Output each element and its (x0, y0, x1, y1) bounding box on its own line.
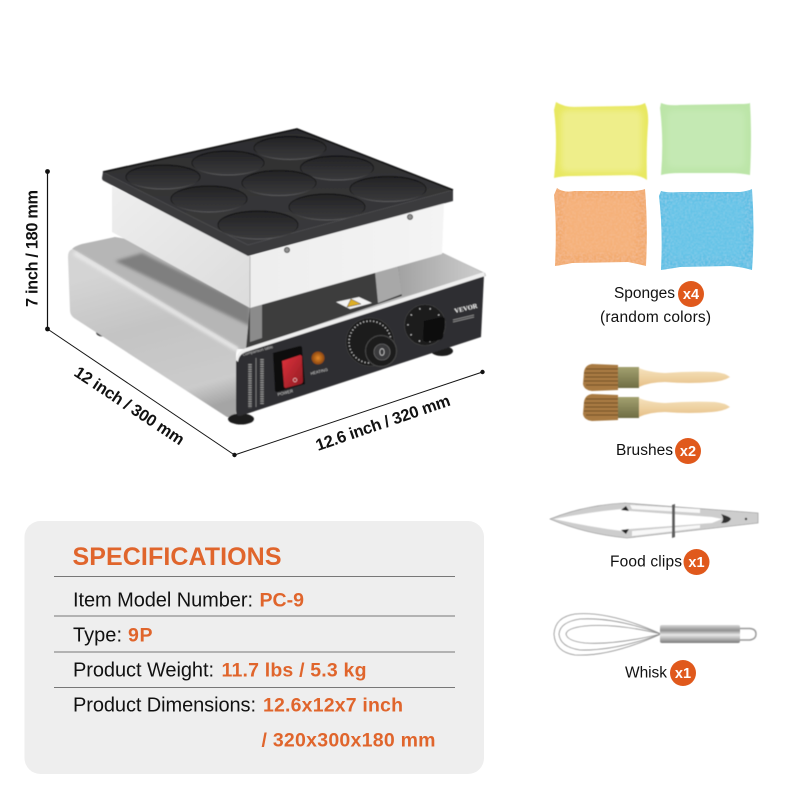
height label: 7 inch / 180 mm (24, 190, 42, 307)
base right deck (398, 253, 485, 297)
rear foot (96, 328, 108, 336)
right foot (431, 346, 453, 356)
loop slot (721, 514, 731, 523)
well 4 (300, 156, 374, 180)
lower arm highlight (632, 525, 700, 536)
sponge: green (660, 103, 751, 175)
green centre (667, 110, 745, 168)
yellow centre (561, 110, 642, 172)
heating label: HEATING (310, 367, 328, 376)
right support (375, 265, 402, 303)
food clips (550, 503, 758, 538)
box right face (250, 203, 444, 308)
width end dot (480, 370, 485, 374)
weight label: Product Weight: (73, 660, 214, 682)
bristles (583, 364, 618, 391)
lower jaw slot (621, 529, 629, 534)
food clips label: Food clips (610, 554, 682, 570)
well 1 (254, 136, 326, 160)
brushes label: Brushes (616, 442, 673, 459)
rivet (745, 518, 747, 520)
upper jaw slot (621, 506, 629, 511)
griddle wells (126, 136, 426, 239)
brush 1 (583, 364, 730, 391)
green rim (660, 103, 751, 175)
base fold highlight (74, 253, 238, 350)
griddle rim (103, 129, 453, 190)
power switch (273, 346, 305, 392)
dimensions imperial: 12.6x12x7 inch (263, 694, 403, 716)
caption: food clips (610, 549, 710, 575)
timer knob (423, 317, 445, 342)
row: model (73, 590, 304, 612)
yellow rim (554, 102, 648, 180)
knob centre (374, 344, 390, 360)
height end dot (45, 169, 50, 174)
column divider (255, 358, 257, 407)
badge text: x1 (688, 555, 705, 571)
bristles (583, 394, 618, 421)
table title: Comparison table (242, 344, 274, 357)
width label: 12.6 inch / 320 mm (313, 392, 453, 455)
well 3 (126, 165, 200, 189)
sponge: orange (554, 188, 647, 266)
panel background (24, 521, 484, 774)
caption: brushes (616, 438, 701, 464)
panel: specifications (24, 521, 484, 774)
griddle box (102, 129, 453, 308)
timer dial (404, 304, 446, 346)
base top surface (72, 237, 486, 349)
base reflection (115, 253, 250, 326)
screw right (407, 214, 413, 220)
screw left (284, 247, 290, 253)
badge circle (678, 281, 704, 307)
temperature dial (346, 318, 396, 366)
row: weight (73, 660, 366, 682)
whisk wires (554, 614, 661, 655)
warning sticker (336, 297, 372, 309)
badge circle (684, 549, 710, 575)
power label: POWER (277, 388, 294, 397)
well 8 (289, 194, 365, 220)
well 2 (192, 151, 264, 175)
sponges label: Sponges (614, 285, 675, 302)
weight value: 11.7 lbs / 5.3 kg (222, 660, 366, 682)
ferrule (618, 397, 639, 418)
brand caption (453, 315, 474, 322)
blue centre (668, 200, 744, 258)
dimension: depth (48, 329, 234, 455)
ferrule (618, 367, 639, 388)
model value: PC-9 (260, 590, 304, 612)
control panel (236, 272, 485, 416)
sticker paper (336, 297, 372, 309)
row: dimensions (73, 694, 436, 752)
handle (639, 368, 730, 387)
upper arm highlight (630, 505, 700, 513)
box corner (249, 256, 251, 308)
fahrenheit column (248, 364, 252, 408)
whisk ring (740, 628, 756, 640)
timer ring (404, 304, 446, 346)
corner dot (232, 453, 237, 457)
switch frame (273, 346, 305, 392)
badge circle (675, 438, 701, 464)
handle (639, 398, 730, 417)
orange rim (554, 188, 647, 266)
badge text: x2 (680, 444, 696, 460)
dimensions label: Product Dimensions: (73, 694, 256, 716)
sponges (554, 102, 754, 270)
blue rim (659, 189, 754, 270)
height base dot (45, 327, 50, 331)
depth label: 12 inch / 300 mm (71, 363, 187, 449)
well 9 (218, 211, 298, 239)
dial ring (346, 318, 394, 366)
knob logo (380, 349, 384, 355)
brushes (583, 364, 730, 421)
depth line (48, 329, 234, 455)
sponges note: (random colors) (600, 309, 711, 326)
type label: Type: (73, 624, 122, 646)
well 5 (242, 170, 316, 196)
temperature knob (366, 336, 396, 366)
sliding ring (672, 504, 675, 538)
well 7 (350, 176, 426, 202)
bristle strands (584, 399, 618, 415)
orange centre (564, 198, 636, 254)
product photo: pancake machine (68, 129, 486, 424)
width line (234, 372, 482, 455)
hazard triangle (347, 299, 361, 307)
tong body (550, 503, 758, 538)
caption: whisk (625, 660, 696, 686)
row: type (73, 624, 152, 646)
brush 2 (583, 394, 730, 421)
whisk (554, 614, 756, 655)
caption: sponges (600, 281, 711, 326)
comparison table (242, 344, 274, 408)
celsius column (260, 359, 264, 404)
left support (250, 303, 262, 342)
griddle plate (103, 129, 453, 245)
dimensions metric: / 320x300x180 mm (262, 730, 436, 752)
badge circle (670, 660, 696, 686)
panel top edge (236, 272, 485, 362)
timer ticks (408, 308, 442, 342)
red rocker (282, 355, 303, 388)
gap below griddle (246, 264, 405, 349)
rocker marks (293, 378, 297, 382)
sponge: yellow (554, 102, 648, 180)
sponge: blue (659, 189, 754, 270)
dimension: width (232, 370, 485, 457)
badge text: x1 (675, 666, 691, 682)
badge text: x4 (683, 287, 699, 303)
whisk handle (660, 625, 740, 643)
front foot (228, 414, 254, 424)
height line (46, 172, 48, 329)
base left side (68, 249, 238, 418)
box left face (112, 186, 250, 308)
jaw gap (554, 509, 722, 531)
panel face (236, 275, 484, 416)
type value: 9P (128, 624, 152, 646)
whisk label: Whisk (625, 664, 667, 682)
dial ticks (349, 321, 391, 363)
well 6 (171, 186, 247, 212)
model label: Item Model Number: (73, 590, 253, 612)
bristle strands (584, 369, 618, 385)
heating lamp (312, 352, 324, 364)
brand mark: VEVOR (454, 303, 478, 315)
griddle plate edge (102, 172, 453, 256)
dimension: height (24, 169, 50, 331)
heading: SPECIFICATIONS (72, 543, 282, 571)
